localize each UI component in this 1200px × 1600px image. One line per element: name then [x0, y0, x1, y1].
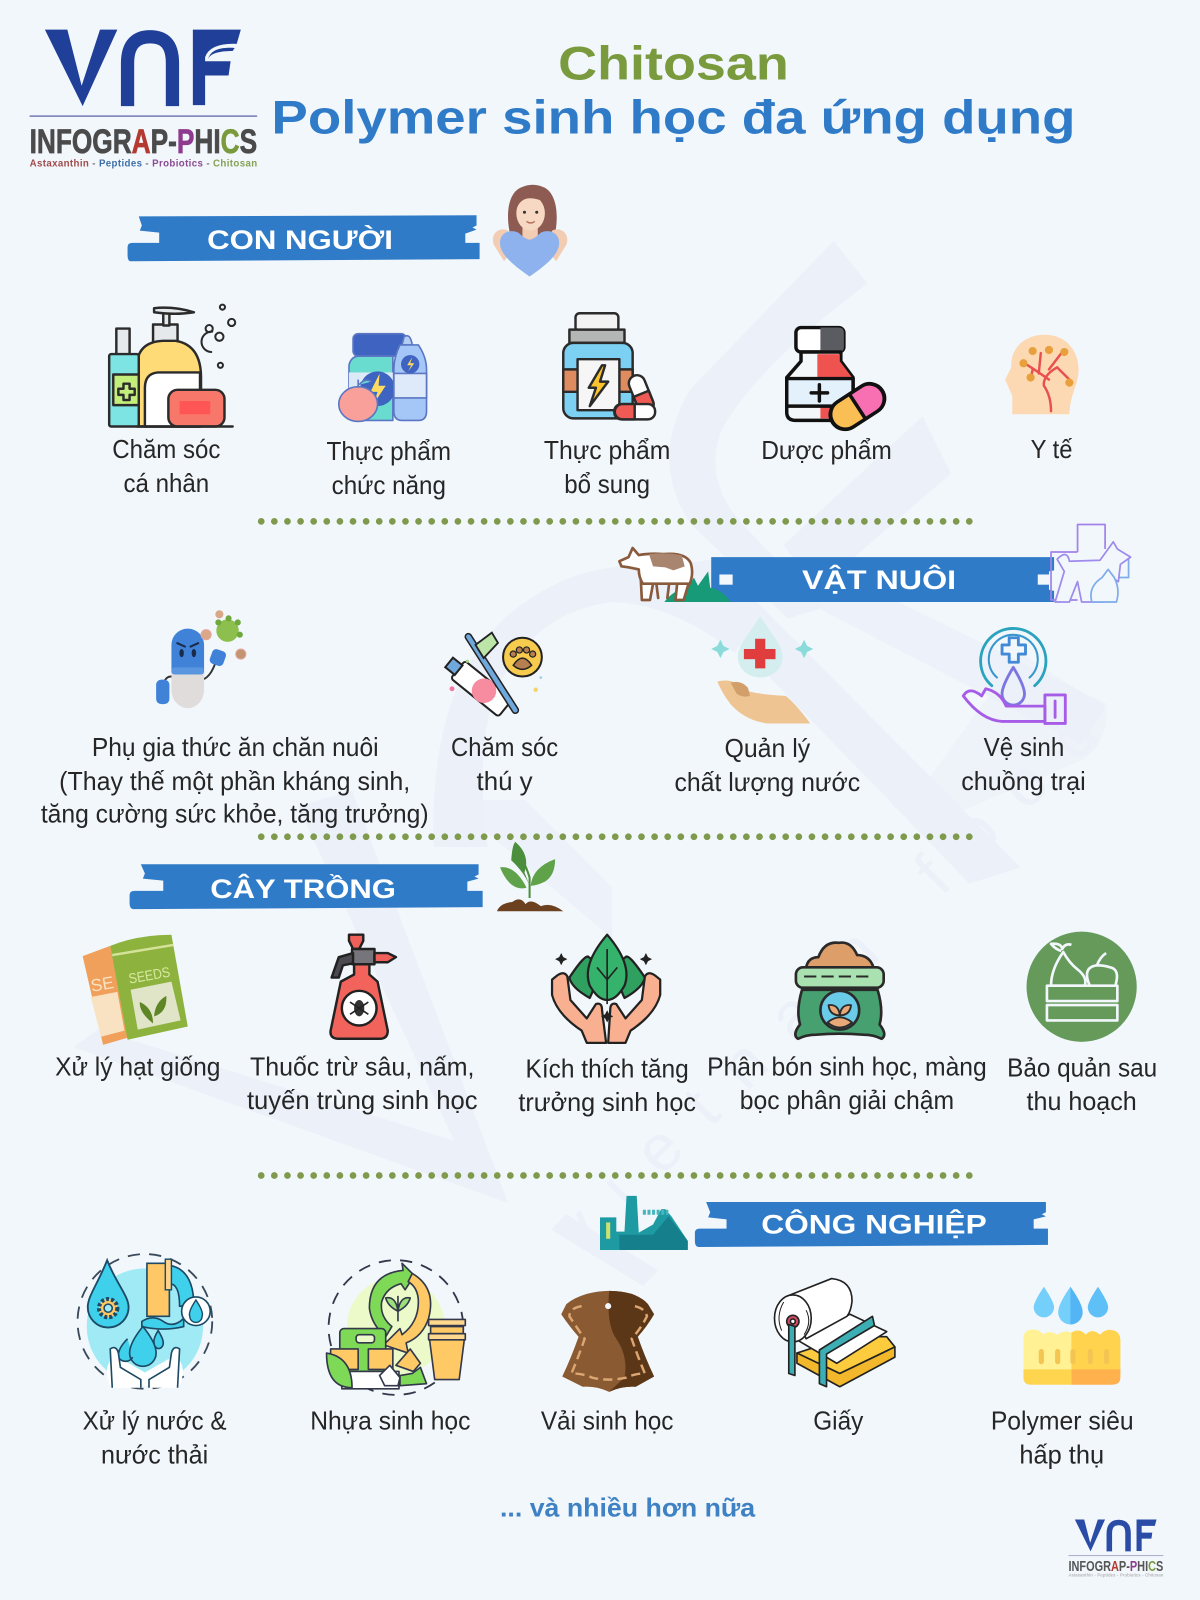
icon: water treatment: [78, 1254, 212, 1389]
label: Chăm sóc: [451, 734, 558, 762]
small logo bottom right: INFOGRAP-PHICS: [1068, 1559, 1164, 1575]
label: Y tế: [1031, 436, 1072, 464]
icon: pesticide sprayer: [331, 935, 396, 1039]
section: công nghiệp: [78, 1196, 1134, 1469]
label: Vải sinh học: [541, 1408, 674, 1436]
label: Thực phẩm: [327, 438, 451, 466]
logo: VNF Infograp-phics: INFOGRAP-PHICS: [30, 123, 257, 161]
label: Phân bón sinh học, màng: [707, 1054, 987, 1082]
closing note: ... và nhiều hơn nữa: [500, 1494, 756, 1522]
title: [271, 38, 1076, 144]
background watermark: VNF logo and vietnam food: vietnam food: [540, 696, 1111, 1267]
label: Xử lý hạt giống: [55, 1054, 220, 1082]
label: Chăm sóc: [112, 436, 221, 464]
icon: factory: [600, 1196, 688, 1250]
label: trưởng sinh học: [518, 1089, 696, 1117]
label: Kích thích tăng: [526, 1056, 689, 1084]
label: Thuốc trừ sâu, nấm,: [250, 1054, 474, 1082]
banner: cây trồng: CÂY TRỒNG: [210, 874, 396, 904]
label: [247, 1054, 478, 1115]
label: [991, 1408, 1134, 1469]
icon: superabsorbent polymer: [1023, 1287, 1120, 1385]
label: bổ sung: [564, 471, 650, 499]
icon: cow: [619, 548, 692, 600]
label: [327, 438, 451, 500]
icon: bioplastic recycling: [327, 1260, 465, 1395]
icon: pets and medical cross: [1051, 524, 1131, 602]
banner: cây trồng: [130, 864, 483, 909]
icon: medicine bottle and capsule: [787, 328, 890, 435]
section: cây trồng: [55, 842, 1157, 1117]
title: Polymer sinh học đa ứng dụng: [271, 92, 1076, 144]
label: Dược phẩm: [761, 437, 892, 465]
logo: VNF Infograp-phics: Astaxanthin - Peptides - Probiotics - Chitosan: [30, 158, 257, 169]
logo: VNF Infograp-phics: [30, 30, 257, 169]
banner: con người: CON NGƯỜI: [207, 225, 393, 255]
label: chất lượng nước: [674, 769, 860, 797]
icon: pill character fighting virus: [156, 610, 246, 708]
label: thu hoạch: [1027, 1088, 1137, 1116]
label: nước thải: [101, 1441, 208, 1469]
banner: công nghiệp: CÔNG NGHIỆP: [761, 1210, 987, 1240]
banner: vật nuôi: VẬT NUÔI: [802, 565, 956, 595]
label: chức năng: [332, 472, 446, 500]
label: [112, 436, 221, 498]
label: [674, 735, 860, 797]
label: Bảo quản sau: [1007, 1055, 1157, 1083]
icon: brain in head: [1005, 335, 1079, 414]
section: vật nuôi: [41, 524, 1131, 828]
icon: seed packets: [83, 935, 188, 1045]
icon: paper roll: [774, 1279, 895, 1387]
label: Nhựa sinh học: [310, 1408, 471, 1436]
small logo bottom right: Astaxanthin - Peptides - Probiotics - Chitosan: [1068, 1573, 1164, 1578]
icon: water drop with red cross over hand: [711, 616, 813, 723]
icon: sprout: [497, 842, 563, 911]
label: tăng cường sức khỏe, tăng trưởng): [41, 800, 429, 828]
label: [961, 734, 1086, 796]
icon: post-harvest fruit crate: [1027, 932, 1137, 1042]
label: [83, 1408, 227, 1469]
icon: fertilizer sack: [795, 943, 884, 1039]
label: chuồng trại: [961, 768, 1086, 796]
label: [518, 1056, 696, 1117]
label: cá nhân: [123, 470, 209, 498]
label: (Thay thế một phần kháng sinh,: [59, 768, 410, 796]
label: [451, 734, 558, 796]
label: hấp thụ: [1019, 1441, 1104, 1469]
label: tuyến trùng sinh học: [247, 1087, 478, 1115]
icon: leather hide: [561, 1291, 654, 1392]
small logo bottom right: [1068, 1519, 1164, 1578]
banner: vật nuôi: [711, 557, 1054, 602]
label: bọc phân giải chậm: [740, 1087, 954, 1115]
label: Polymer siêu: [991, 1408, 1134, 1436]
label: Xử lý nước &: [83, 1408, 227, 1436]
icon: personal care: [109, 305, 235, 427]
label: Giấy: [813, 1408, 863, 1436]
label: thú y: [477, 768, 533, 796]
icon: functional food: [339, 334, 427, 421]
label: Quản lý: [724, 735, 810, 763]
label: Phụ gia thức ăn chăn nuôi: [92, 734, 379, 762]
icon: seed packets: SE: [89, 972, 115, 996]
label: Thực phẩm: [544, 437, 670, 465]
banner: con người: [128, 215, 480, 261]
label: [707, 1054, 987, 1115]
icon: hands with leaves: [552, 935, 660, 1043]
label: [544, 437, 670, 499]
section: con người: [109, 185, 1079, 500]
icon: grass: [664, 571, 731, 602]
banner: công nghiệp: [695, 1202, 1048, 1247]
label: Vệ sinh: [984, 734, 1064, 762]
icon: pet toothbrush and paw: [441, 633, 542, 718]
icon: seed packets: SEEDS: [128, 965, 171, 988]
background watermark: VNF logo and vietnam food: [73, 241, 1111, 1286]
label: [41, 734, 429, 828]
label: [1007, 1055, 1157, 1116]
icon: hygiene hand and water: [963, 628, 1065, 723]
icon: dietary supplement: [563, 313, 656, 419]
icon: woman hugging heart: [493, 185, 567, 277]
title: Chitosan: [558, 38, 789, 90]
